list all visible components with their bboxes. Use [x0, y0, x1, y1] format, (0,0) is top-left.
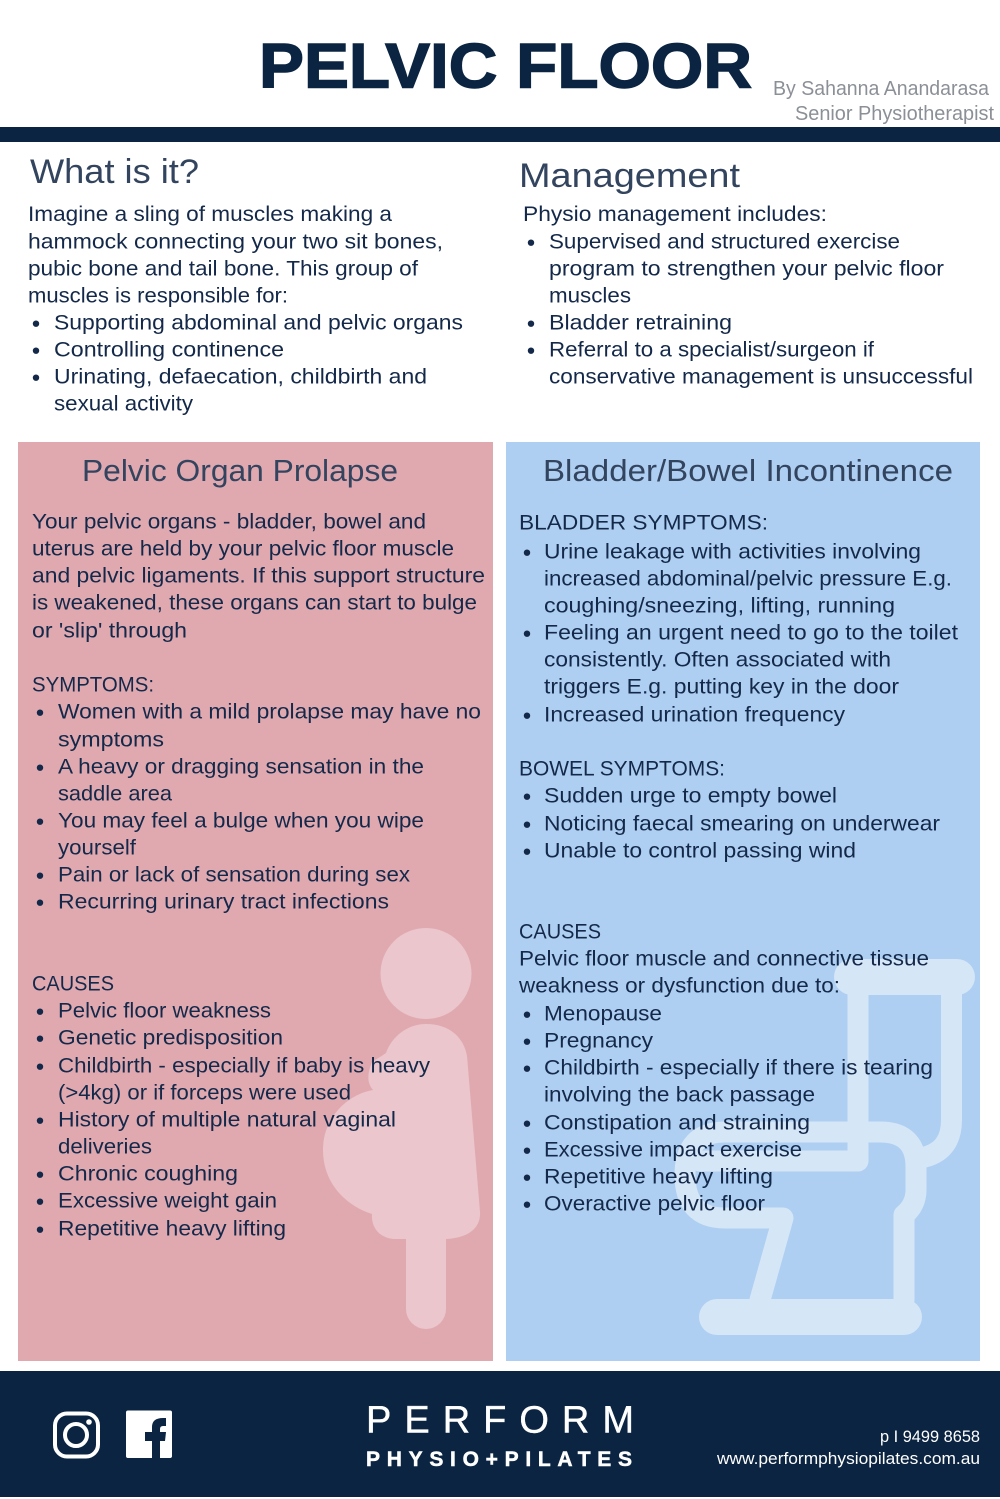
text block: management intro: Physio management includes:: [523, 202, 827, 226]
list: bladder symptoms: triggers E.g. putting key in the door: [544, 675, 899, 699]
list: incontinence causes: Childbirth - especially if there is tearing: [544, 1056, 933, 1080]
icon: facebook: [126, 1410, 172, 1458]
list: incontinence causes: involving the back passage: [544, 1083, 815, 1107]
panel background: pink: [18, 442, 493, 1361]
list: bowel symptoms: Unable to control passing wind: [544, 839, 856, 863]
icon: toilet: [685, 977, 957, 1317]
list: prolapse causes: History of multiple natural vaginal: [58, 1108, 396, 1132]
list: prolapse symptoms: Pain or lack of sensation during sex: [58, 863, 410, 887]
author byline: [773, 78, 994, 125]
logo: perform physio+pilates: [366, 1400, 634, 1471]
list: prolapse symptoms: saddle area: [58, 782, 172, 806]
list: bowel symptoms: BOWEL SYMPTOMS:: [519, 757, 725, 781]
list: prolapse symptoms: Recurring urinary tract infections: [58, 890, 389, 914]
author byline: By Sahanna Anandarasa: [773, 78, 990, 100]
list: management options: program to strengthen your pelvic floor: [549, 257, 944, 281]
list: management options: conservative management is unsuccessful: [549, 365, 973, 389]
list: management options: [528, 230, 973, 389]
list: bladder symptoms: Increased urination frequency: [544, 703, 845, 727]
list: incontinence causes: Constipation and straining: [544, 1111, 810, 1135]
list: prolapse causes: deliveries: [58, 1135, 152, 1159]
list: incontinence causes: [518, 920, 933, 1216]
logo: perform physio+pilates: PERFORM: [366, 1400, 634, 1442]
list: prolapse symptoms: symptoms: [58, 728, 164, 752]
section: management: [519, 157, 973, 389]
list: incontinence causes: weakness or dysfunction due to:: [518, 974, 840, 998]
list: bladder symptoms: Urine leakage with activities involving: [544, 540, 921, 564]
list: incontinence causes: Overactive pelvic floor: [544, 1192, 765, 1216]
text block: what is it description: Imagine a sling of muscles making a: [28, 202, 392, 226]
text block: prolapse description: uterus are held by your pelvic floor muscle: [32, 537, 454, 561]
list: incontinence causes: Excessive impact exercise: [544, 1138, 802, 1162]
list: prolapse causes: Pelvic floor weakness: [58, 999, 271, 1023]
text block: what is it description: [28, 202, 443, 308]
text block: what is it description: pubic bone and tail bone. This group of: [28, 257, 418, 281]
panel: bladder/bowel incontinence: [506, 442, 980, 1361]
list: prolapse symptoms: yourself: [58, 836, 136, 860]
icon: instagram: [55, 1414, 98, 1456]
header bar: [0, 127, 1000, 142]
list: bowel symptoms: [519, 757, 940, 863]
list: incontinence causes: Menopause: [544, 1002, 662, 1026]
list: bladder symptoms: Feeling an urgent need to go to the toilet: [544, 621, 958, 645]
list: incontinence causes: Pregnancy: [544, 1029, 653, 1053]
list: bladder symptoms: BLADDER SYMPTOMS:: [519, 511, 768, 535]
list: prolapse symptoms: [32, 673, 481, 914]
text block: prolapse description: and pelvic ligaments. If this support structure: [32, 564, 485, 588]
list: management options: Supervised and structured exercise: [549, 230, 900, 254]
list: muscle functions: [33, 311, 463, 416]
contact details: www.performphysiopilates.com.au: [716, 1449, 980, 1468]
author byline: Senior Physiotherapist: [795, 103, 994, 125]
text block: prolapse description: Your pelvic organs - bladder, bowel and: [32, 510, 426, 534]
list: bladder symptoms: increased abdominal/pelvic pressure E.g.: [544, 567, 952, 591]
text block: what is it description: hammock connecting your two sit bones,: [28, 230, 443, 254]
section: what is it: [28, 153, 463, 416]
list: prolapse symptoms: SYMPTOMS:: [32, 673, 154, 697]
list: muscle functions: Supporting abdominal and pelvic organs: [54, 311, 463, 335]
list: bowel symptoms: Sudden urge to empty bowel: [544, 784, 837, 808]
list: bowel symptoms: Noticing faecal smearing on underwear: [544, 812, 940, 836]
heading: pelvic organ prolapse: Pelvic Organ Prolapse: [82, 453, 398, 488]
panel: pelvic organ prolapse: [18, 442, 493, 1361]
footer: [0, 1371, 1000, 1497]
footer background: [0, 1371, 1000, 1497]
list: incontinence causes: Pelvic floor muscle and connective tissue: [519, 947, 929, 971]
title: PELVIC FLOOR: [259, 32, 752, 102]
text block: prolapse description: [32, 510, 485, 643]
list: prolapse causes: Genetic predisposition: [58, 1026, 283, 1050]
heading: bladder/bowel incontinence: Bladder/Bowel Incontinence: [543, 453, 953, 488]
list: bladder symptoms: [519, 511, 958, 727]
icon: pregnant woman: [323, 928, 480, 1329]
list: muscle functions: Urinating, defaecation, childbirth and: [54, 365, 427, 389]
list: bladder symptoms: consistently. Often associated with: [544, 648, 891, 672]
list: incontinence causes: CAUSES: [519, 920, 601, 944]
list: management options: Referral to a specialist/surgeon if: [549, 338, 874, 362]
list: prolapse causes: Chronic coughing: [58, 1162, 238, 1186]
list: incontinence causes: Repetitive heavy lifting: [544, 1165, 773, 1189]
text block: what is it description: muscles is responsible for:: [28, 284, 288, 308]
logo: perform physio+pilates: PHYSIO+PILATES: [366, 1448, 632, 1471]
list: prolapse causes: Childbirth - especially if baby is heavy: [58, 1054, 430, 1078]
panel background: blue: [506, 442, 980, 1361]
list: prolapse symptoms: You may feel a bulge when you wipe: [58, 809, 424, 833]
list: bladder symptoms: coughing/sneezing, lifting, running: [544, 594, 895, 618]
list: prolapse causes: CAUSES: [32, 972, 114, 996]
list: prolapse symptoms: Women with a mild prolapse may have no: [58, 700, 481, 724]
list: muscle functions: sexual activity: [54, 392, 193, 416]
heading: management: Management: [519, 157, 741, 195]
heading: what is it: What is it?: [30, 153, 199, 191]
list: prolapse causes: Excessive weight gain: [58, 1189, 277, 1213]
list: management options: Bladder retraining: [549, 311, 732, 335]
text block: prolapse description: or 'slip' through: [32, 619, 187, 643]
contact details: [716, 1427, 980, 1468]
list: prolapse symptoms: A heavy or dragging sensation in the: [58, 755, 424, 779]
list: management options: muscles: [549, 284, 631, 308]
contact details: p I 9499 8658: [880, 1427, 980, 1446]
text block: prolapse description: is weakened, these organs can start to bulge: [32, 591, 477, 615]
list: prolapse causes: [32, 972, 430, 1241]
list: prolapse causes: Repetitive heavy lifting: [58, 1217, 286, 1241]
list: prolapse causes: (>4kg) or if forceps were used: [58, 1081, 351, 1105]
list: muscle functions: Controlling continence: [54, 338, 284, 362]
